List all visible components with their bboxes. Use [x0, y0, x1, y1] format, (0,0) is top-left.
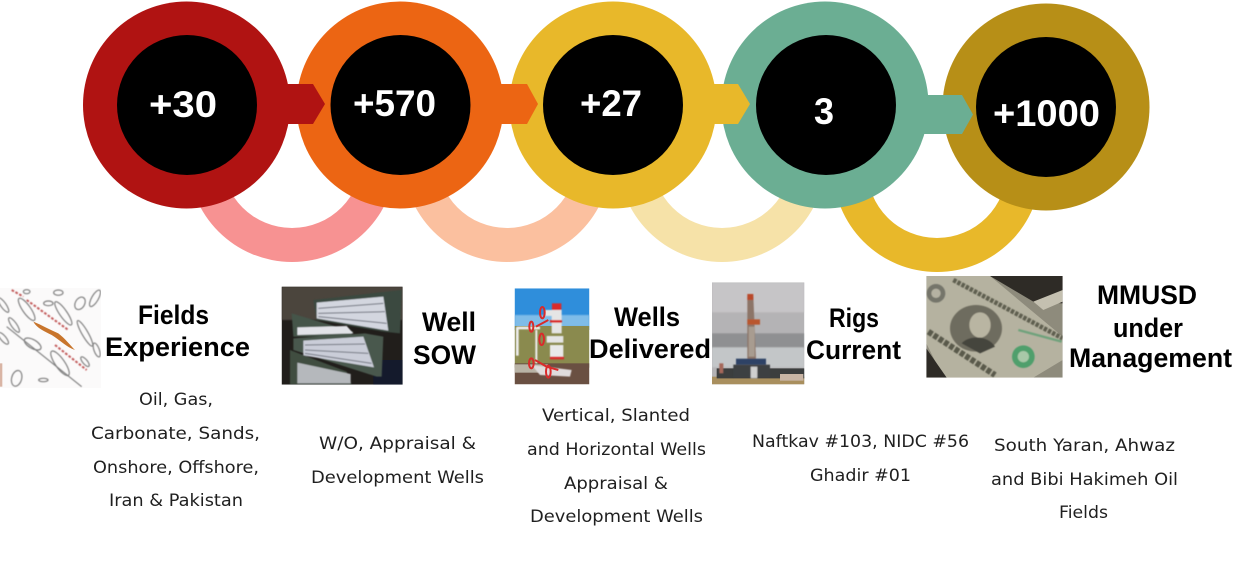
step 1 ring and number: +30 — [149, 84, 217, 125]
text: fields experience details: Carbonate, Sands, — [91, 424, 260, 444]
heading: MMUSD under Management: under — [1113, 313, 1183, 343]
heading: Fields Experience: Fields — [138, 300, 209, 330]
text: rigs details: Naftkav #103, NIDC #56 — [752, 432, 969, 452]
heading: Rigs Current — [806, 303, 901, 365]
heading: Wells Delivered — [589, 302, 711, 364]
step 5 ring and number — [915, 4, 1150, 210]
connector arc 2 — [403, 158, 611, 262]
heading: Well SOW — [413, 307, 476, 370]
heading: Fields Experience — [105, 300, 250, 362]
text: fields experience details: Onshore, Offshore, — [93, 458, 259, 478]
text: well scope details: Development Wells — [311, 468, 484, 488]
heading: Well SOW: Well — [422, 307, 476, 337]
text: management details: and Bibi Hakimeh Oil — [991, 470, 1178, 490]
text: wells delivered details: Appraisal & — [564, 474, 668, 494]
heading: Rigs Current: Rigs — [829, 303, 879, 333]
step 2 ring and number — [280, 2, 504, 208]
image: wellhead — [515, 288, 589, 384]
text: fields experience details: Oil, Gas, — [139, 390, 213, 410]
step 2 ring and number: +570 — [353, 83, 436, 124]
image: oil field map — [0, 288, 103, 388]
step 5 ring and number: +1000 — [993, 93, 1100, 134]
heading: Fields Experience: Experience — [105, 332, 250, 362]
text: fields experience details: Iran & Pakistan — [109, 491, 243, 511]
text: management details — [991, 436, 1178, 523]
step 4 ring and number — [700, 2, 928, 208]
text: wells delivered details: Vertical, Slanted — [542, 406, 690, 426]
heading: MMUSD under Management — [1069, 280, 1232, 373]
text: rigs details: Ghadir #01 — [810, 466, 911, 486]
connector arc 4 — [833, 168, 1041, 272]
text: wells delivered details — [527, 406, 706, 527]
text: management details: South Yaran, Ahwaz — [994, 436, 1175, 456]
text: wells delivered details: and Horizontal Wells — [527, 440, 706, 460]
heading: Well SOW: SOW — [413, 340, 476, 370]
text: rigs details — [752, 432, 969, 486]
heading: Rigs Current: Current — [806, 335, 901, 365]
step 4 ring and number: 3 — [814, 91, 834, 132]
heading: MMUSD under Management: MMUSD — [1097, 280, 1197, 310]
text: management details: Fields — [1059, 503, 1108, 523]
step 3 ring and number — [490, 2, 716, 208]
heading: Wells Delivered: Delivered — [589, 334, 711, 364]
step 3 ring and number: +27 — [580, 83, 642, 124]
image: dollar bills — [926, 276, 1063, 378]
text: well scope details: W/O, Appraisal & — [319, 434, 476, 454]
connector arc 1 — [188, 158, 396, 262]
heading: Wells Delivered: Wells — [614, 302, 680, 332]
image: drilling rig — [712, 282, 804, 384]
step 1 ring and number — [83, 2, 290, 208]
text: well scope details — [311, 434, 484, 488]
connector arc 3 — [618, 158, 826, 262]
text: fields experience details — [91, 390, 260, 511]
text: wells delivered details: Development Wells — [530, 507, 703, 527]
image: stacked binders — [282, 287, 403, 385]
heading: MMUSD under Management: Management — [1069, 343, 1232, 373]
